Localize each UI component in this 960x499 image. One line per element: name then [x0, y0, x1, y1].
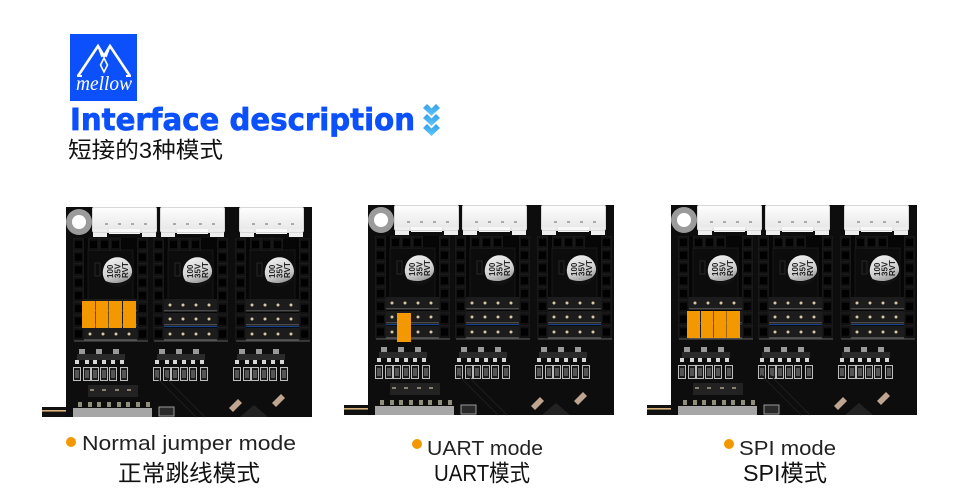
subtitle: 短接的3种模式 — [68, 138, 223, 163]
capacitor label 2: RVT — [503, 260, 512, 276]
capacitor label 1: 35V — [416, 261, 424, 276]
capacitor label 3: 35V — [880, 261, 890, 276]
logo: mellow: mellow — [76, 73, 133, 95]
capacitor label 1: 35V — [114, 263, 122, 278]
capacitor label 3: 100 — [873, 262, 882, 276]
logo: mellow — [70, 34, 137, 101]
caption: UART mode: UART模式 — [434, 460, 530, 486]
capacitor label 2: 35V — [194, 263, 202, 278]
caption: normal jumper mode — [66, 433, 296, 486]
capacitor label 1: 100 — [106, 264, 115, 278]
caption: UART mode: UART mode — [427, 438, 543, 460]
capacitor label 2: 35V — [798, 261, 808, 276]
caption: SPI mode: SPI mode — [739, 438, 836, 460]
capacitor label 2: RVT — [806, 260, 815, 276]
capacitor label 2: 100 — [488, 262, 497, 276]
jumper highlight — [397, 313, 411, 342]
icon: triple chevron down — [423, 104, 440, 136]
capacitor label 3: 100 — [268, 264, 277, 278]
panel: SPI mode — [647, 205, 917, 415]
capacitor label 1: 35V — [718, 261, 728, 276]
capacitor label 2: RVT — [201, 262, 210, 278]
capacitor label 2: 35V — [496, 261, 504, 276]
capacitor label 1: RVT — [121, 262, 130, 278]
caption: normal jumper mode: Normal jumper mode — [82, 433, 296, 455]
panel: UART mode — [344, 205, 614, 415]
jumper highlight — [82, 301, 136, 328]
capacitor label 1: 100 — [408, 262, 417, 276]
capacitor label 3: RVT — [585, 260, 594, 276]
panel: normal jumper mode — [42, 207, 312, 417]
capacitor label 2: 100 — [791, 262, 800, 276]
capacitor label 3: RVT — [888, 260, 897, 276]
caption: UART mode — [412, 438, 543, 486]
capacitor label 3: 35V — [276, 263, 284, 278]
capacitor label 3: 100 — [570, 262, 579, 276]
title: Interface description — [70, 103, 415, 138]
jumper highlight — [687, 311, 740, 338]
caption: SPI mode: SPI模式 — [743, 460, 827, 486]
capacitor label 3: 35V — [578, 261, 586, 276]
capacitor label 3: RVT — [283, 262, 292, 278]
capacitor label 2: 100 — [186, 264, 195, 278]
caption: SPI mode — [724, 438, 836, 486]
capacitor label 1: RVT — [726, 260, 735, 276]
capacitor label 1: RVT — [423, 260, 432, 276]
capacitor label 1: 100 — [711, 262, 720, 276]
caption: normal jumper mode: 正常跳线模式 — [118, 460, 260, 486]
